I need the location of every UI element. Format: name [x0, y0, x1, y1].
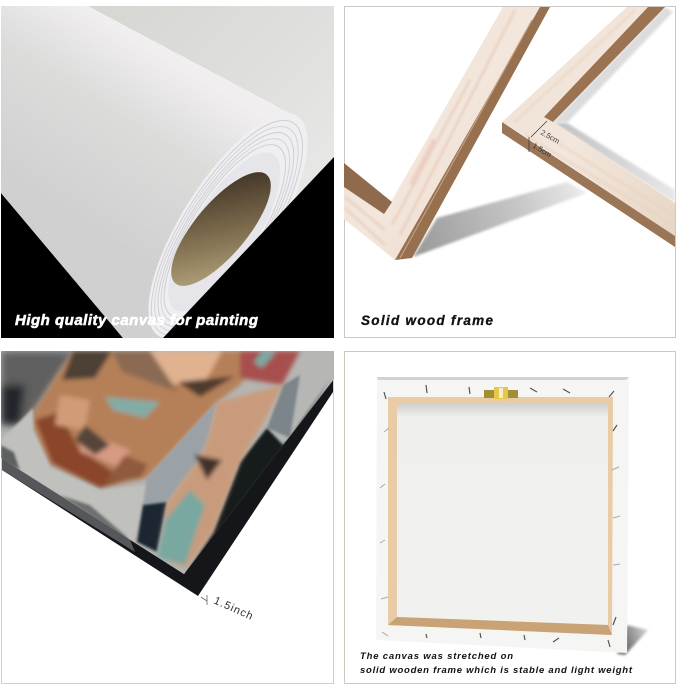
- background strokes: [1, 351, 340, 438]
- wooden stretcher frame: [388, 397, 613, 635]
- panel: painted canvas corner: [1, 351, 340, 684]
- canvas back outer: [376, 377, 629, 653]
- panel: back of stretched canvas: [344, 352, 676, 684]
- dimension label: 1.5cm: 1.5cm: [531, 141, 553, 159]
- roll core hole: [171, 172, 271, 286]
- caption: solid wood frame: Solid wood frame: [361, 313, 493, 328]
- gold hanger: [484, 387, 518, 399]
- roll end with wound layers: [148, 114, 308, 338]
- caption: stretched canvas: solid wooden frame which is stable and light weight: [360, 665, 633, 676]
- panel: canvas roll: [1, 6, 336, 360]
- black backdrop right of roll: [163, 157, 334, 338]
- staples: [380, 385, 620, 647]
- drop shadow: [617, 625, 648, 655]
- wood frame: right corner: [502, 7, 675, 247]
- panel: solid wood frame: [344, 6, 676, 338]
- white garment: [1, 408, 147, 545]
- caption: canvas roll: High quality canvas for painting: [15, 312, 258, 329]
- painted torso: [33, 351, 300, 488]
- canvas roll body: [1, 6, 295, 338]
- caption: stretched canvas: The canvas was stretched on: [360, 651, 513, 662]
- canvas side edge: [2, 379, 333, 596]
- painting face: [1, 351, 340, 591]
- inner canvas: [397, 404, 608, 625]
- dark strokes: [137, 375, 330, 580]
- frame cast shadows: [413, 7, 675, 257]
- dimension label: 2.5cm: 2.5cm: [539, 128, 561, 146]
- grey wedge: [143, 402, 217, 505]
- caption: stretched canvas: [360, 651, 633, 676]
- canvas top edge: [377, 377, 629, 380]
- wood frame: left corner: [344, 7, 550, 260]
- raised arm: [157, 385, 283, 568]
- dimension label: 1.5 inch: 1.5inch: [212, 595, 255, 623]
- bottom wood strip: [388, 617, 612, 635]
